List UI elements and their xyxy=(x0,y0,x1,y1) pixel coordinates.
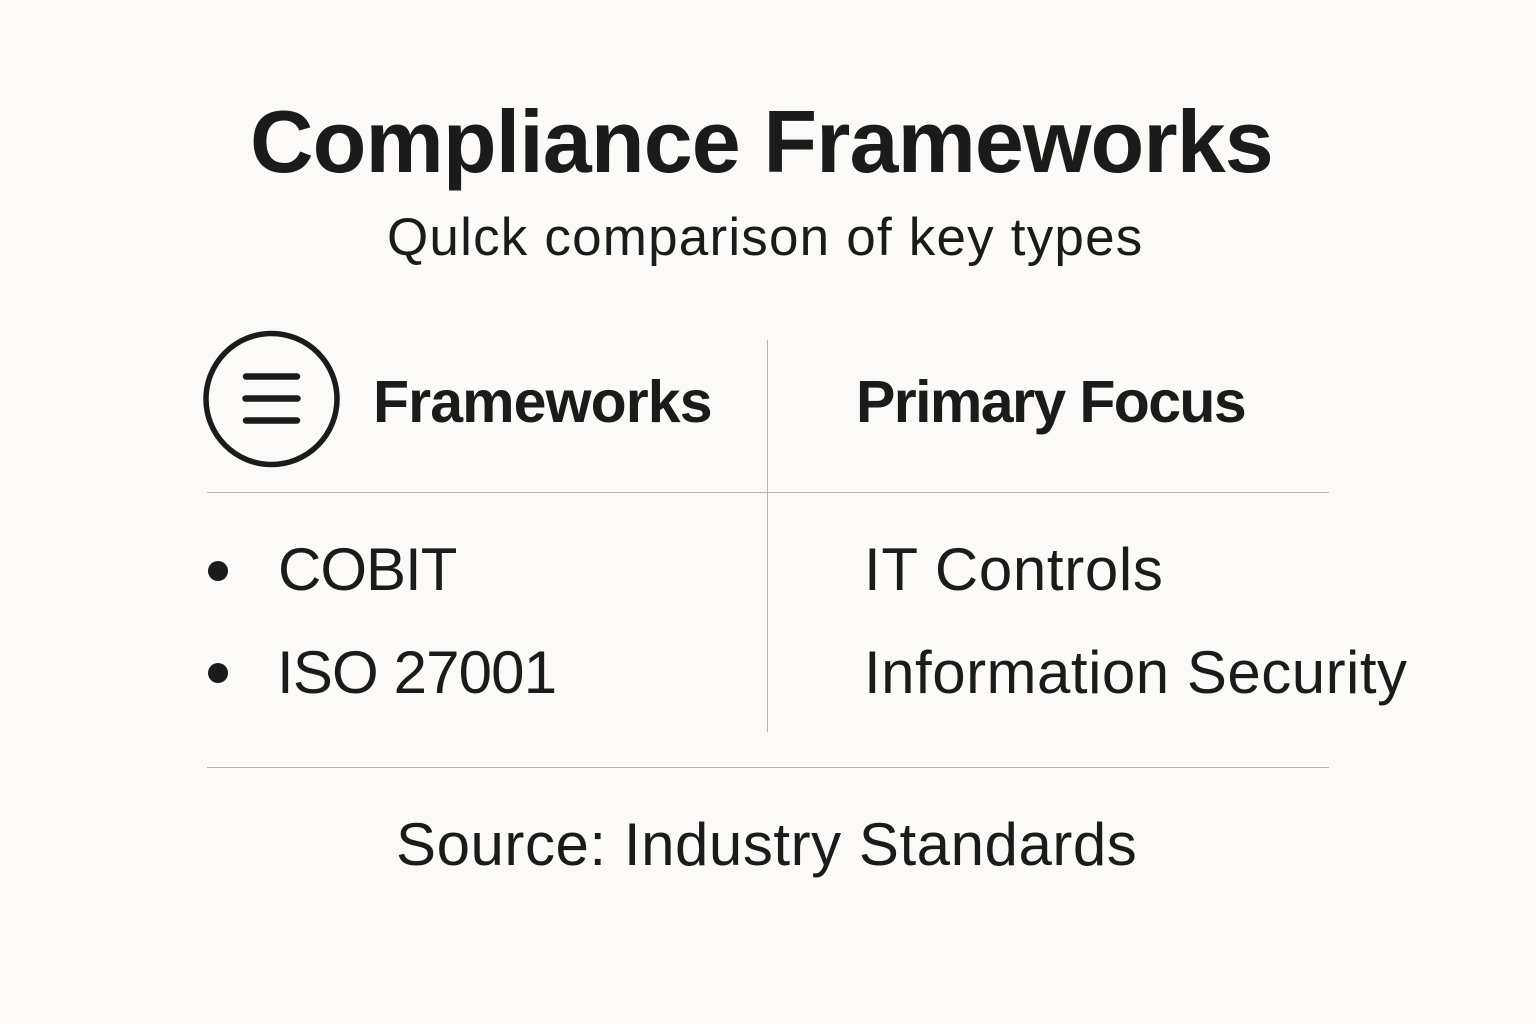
icon: menu in circle xyxy=(203,330,340,468)
title: Compliance Frameworks xyxy=(250,92,1273,191)
bullet: ISO 27001 xyxy=(208,663,228,683)
row 1 focus: IT Controls: IT Controls xyxy=(864,536,1163,603)
column heading: primary focus: Primary Focus xyxy=(856,369,1245,435)
source note: Source: Industry Standards xyxy=(396,811,1137,878)
row 2 framework: ISO 27001: ISO 27001 xyxy=(277,639,556,706)
subtitle: Qulck comparison of key types xyxy=(387,208,1144,267)
row 1 framework: COBIT: COBIT xyxy=(278,536,456,603)
row 2 focus: Information Security: Information Security xyxy=(864,639,1408,706)
bullet: COBIT xyxy=(208,561,228,581)
column heading: frameworks: Frameworks xyxy=(373,369,712,435)
